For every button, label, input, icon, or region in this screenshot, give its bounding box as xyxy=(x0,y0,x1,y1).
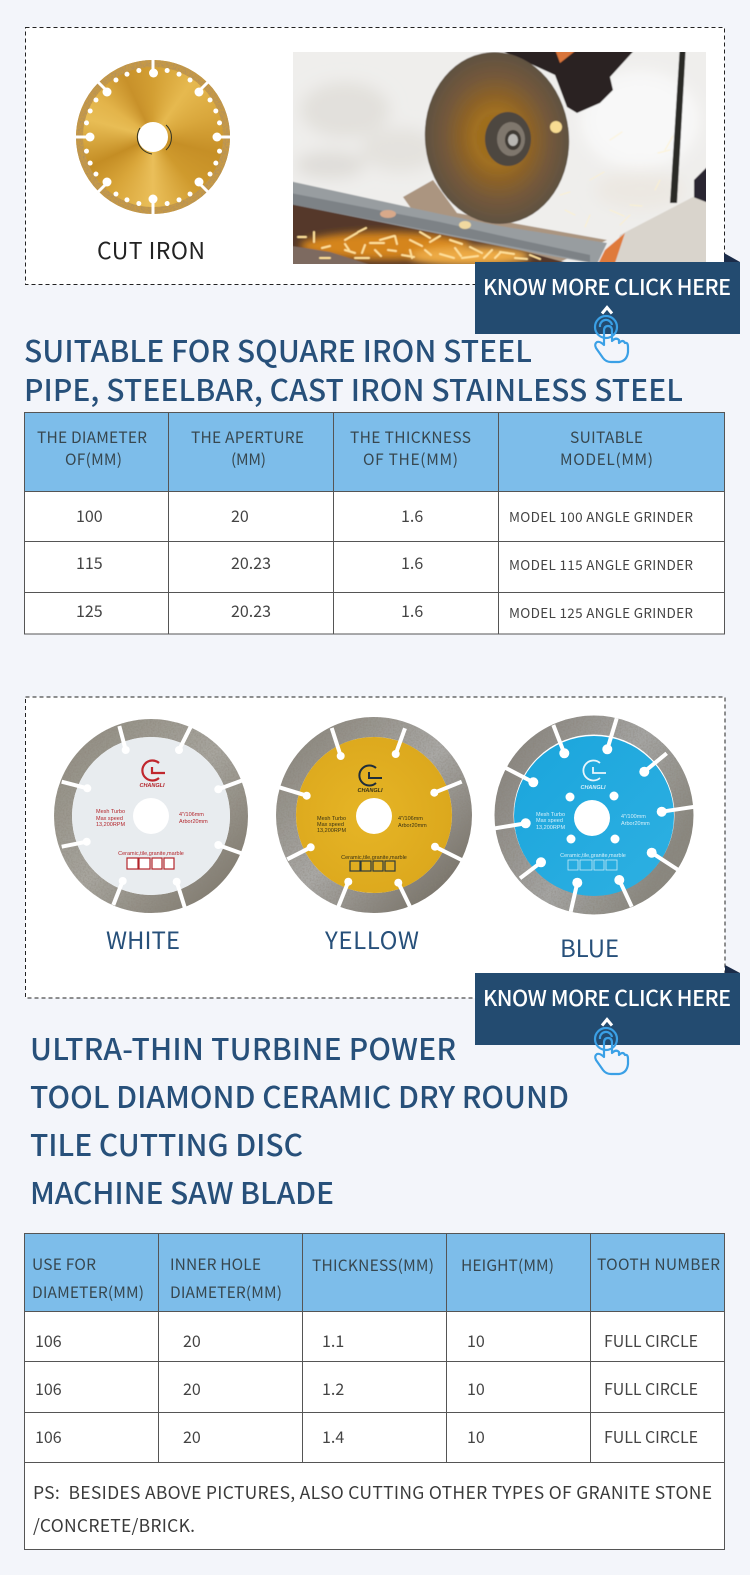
icon: tap hand xyxy=(595,316,628,362)
icon: yellow blade: 4"/106mm xyxy=(398,816,423,822)
table: iron disc specifications: 115 xyxy=(76,550,103,574)
icon: blue blade: Arbor20mm xyxy=(621,821,650,827)
table: saw blade specifications: 106 xyxy=(35,1376,62,1400)
table: iron disc specifications: 1.6 xyxy=(401,503,423,527)
icon: white blade: 13,200RPM xyxy=(96,822,125,828)
icon: white blade: CHANGLI xyxy=(139,783,165,789)
icon: yellow blade: Ceramic,tile,granite,marble xyxy=(341,855,407,861)
glove xyxy=(503,52,634,114)
note: ps xyxy=(33,1480,712,1538)
label: yellow: YELLOW xyxy=(324,921,419,956)
table: saw blade specifications xyxy=(24,1234,724,1550)
table: saw blade specifications: 10 xyxy=(467,1424,485,1448)
brown plate xyxy=(403,180,607,262)
sleeve and hair xyxy=(693,167,706,203)
heading: suitable for square iron xyxy=(24,327,683,410)
heading: ultra-thin turbine: TOOL DIAMOND CERAMIC DRY ROUND xyxy=(30,1073,569,1117)
icon: yellow blade: 13,200RPM xyxy=(317,828,346,834)
table: saw blade specifications: HEIGHT(MM) xyxy=(461,1254,554,1276)
table: saw blade specifications: 20 xyxy=(183,1376,201,1400)
pole xyxy=(670,44,686,203)
table: saw blade specifications: 20 xyxy=(183,1328,201,1352)
photo: angle grinder cutting steel xyxy=(293,52,706,264)
icon: yellow blade xyxy=(279,727,462,907)
table: saw blade specifications: 20 xyxy=(183,1424,201,1448)
icon: white blade: Max speed xyxy=(96,816,123,822)
table: iron disc specifications: MODEL 115 ANGLE GRINDER xyxy=(509,554,693,574)
table: saw blade specifications: 1.2 xyxy=(322,1376,344,1400)
panel: colour options xyxy=(26,697,740,1074)
table: saw blade specifications: FULL CIRCLE xyxy=(604,1376,698,1400)
table: saw blade specifications: 1.1 xyxy=(322,1328,344,1352)
table: saw blade specifications: FULL CIRCLE xyxy=(604,1424,698,1448)
heading: ultra-thin turbine: ULTRA-THIN TURBINE POWER xyxy=(30,1025,456,1069)
table: iron disc specifications: THE THICKNESS xyxy=(350,426,471,448)
icon: yellow blade: Arbor20mm xyxy=(398,823,427,829)
table: saw blade specifications: THICKNESS(MM) xyxy=(312,1254,434,1276)
table: saw blade specifications: TOOTH NUMBER xyxy=(597,1253,720,1275)
heading: ultra-thin turbine xyxy=(30,1025,569,1213)
icon: white blade: 4"/106mm xyxy=(179,812,204,818)
table: iron disc specifications: SUITABLE xyxy=(570,426,643,448)
table: saw blade specifications: 1.4 xyxy=(322,1424,344,1448)
table: saw blade specifications: 106 xyxy=(35,1328,62,1352)
icon: gold cutting disc xyxy=(75,59,231,215)
table: iron disc specifications: 125 xyxy=(76,598,103,622)
icon: white blade xyxy=(62,726,243,908)
table: iron disc specifications: OF THE(MM) xyxy=(363,448,458,470)
table: iron disc specifications: 1.6 xyxy=(401,598,423,622)
lower dark band xyxy=(293,204,566,264)
table: iron disc specifications xyxy=(24,412,724,634)
heading: ultra-thin turbine: MACHINE SAW BLADE xyxy=(30,1169,334,1213)
icon: blue blade: Ceramic,tile,granite,marble xyxy=(560,853,626,859)
icon: yellow blade: Max speed xyxy=(317,822,344,828)
table: iron disc specifications: THE APERTURE xyxy=(191,426,304,448)
table: saw blade specifications: 10 xyxy=(467,1328,485,1352)
icon: yellow blade: CHANGLI xyxy=(357,788,383,794)
table: saw blade specifications: USE FOR xyxy=(32,1253,96,1275)
table: iron disc specifications: MODEL(MM) xyxy=(560,448,653,470)
table: saw blade specifications: DIAMETER(MM) xyxy=(170,1281,282,1303)
note: ps: PS: BESIDES ABOVE PICTURES, ALSO CUTTING OTHER TYPES OF GRANITE STONE xyxy=(33,1480,712,1505)
icon: chevron xyxy=(602,1020,612,1026)
table: iron disc specifications: 20 xyxy=(231,503,249,527)
table: saw blade specifications: 106 xyxy=(35,1424,62,1448)
steel bar xyxy=(285,180,607,264)
icon: blue blade: Max speed xyxy=(536,818,563,824)
table: iron disc specifications: (MM) xyxy=(231,448,266,470)
icon: blue blade: 13,200RPM xyxy=(536,825,565,831)
label: blue: BLUE xyxy=(560,929,619,964)
icon: white blade: Arbor20mm xyxy=(179,819,208,825)
button: know more: KNOW MORE CLICK HERE xyxy=(483,982,731,1013)
table: iron disc specifications: 100 xyxy=(76,503,103,527)
sparks xyxy=(298,228,540,259)
icon: blue blade: Mesh Turbo xyxy=(536,812,565,818)
table: iron disc specifications: MODEL 125 ANGLE GRINDER xyxy=(509,602,693,622)
label: cut iron: CUT IRON xyxy=(97,232,205,266)
heading: suitable for square iron: SUITABLE FOR SQUARE IRON STEEL xyxy=(24,327,532,371)
icon: chevron xyxy=(602,308,612,314)
table: saw blade specifications: DIAMETER(MM) xyxy=(32,1281,144,1303)
icon: white blade: Ceramic,tile,granite,marble xyxy=(118,851,184,857)
icon: blue blade: 4"/100mm xyxy=(621,814,646,820)
button: know more xyxy=(475,965,740,1074)
button: know more xyxy=(475,253,740,362)
table: iron disc specifications: OF(MM) xyxy=(65,448,122,470)
table: iron disc specifications: 1.6 xyxy=(401,550,423,574)
table: iron disc specifications: 20.23 xyxy=(231,598,271,622)
icon: yellow blade: Mesh Turbo xyxy=(317,816,346,822)
table: saw blade specifications: 10 xyxy=(467,1376,485,1400)
table: iron disc specifications: 20.23 xyxy=(231,550,271,574)
heading: ultra-thin turbine: TILE CUTTING DISC xyxy=(30,1121,303,1165)
grinder disc xyxy=(425,73,500,215)
panel: cut iron xyxy=(26,28,740,362)
label: white: WHITE xyxy=(106,921,180,956)
button: know more: KNOW MORE CLICK HERE xyxy=(483,271,731,302)
icon: tap hand xyxy=(595,1028,628,1074)
table: iron disc specifications: MODEL 100 ANGLE GRINDER xyxy=(509,506,693,526)
icon: blue blade: CHANGLI xyxy=(580,785,606,791)
note: ps: /CONCRETE/BRICK. xyxy=(33,1513,195,1538)
table: saw blade specifications: FULL CIRCLE xyxy=(604,1328,698,1352)
table: iron disc specifications: THE DIAMETER xyxy=(37,426,147,448)
icon: blue blade xyxy=(495,718,695,912)
table: saw blade specifications: INNER HOLE xyxy=(170,1253,261,1275)
icon: white blade: Mesh Turbo xyxy=(96,809,125,815)
heading: suitable for square iron: PIPE, STEELBAR, CAST IRON STAINLESS STEEL xyxy=(24,366,683,410)
